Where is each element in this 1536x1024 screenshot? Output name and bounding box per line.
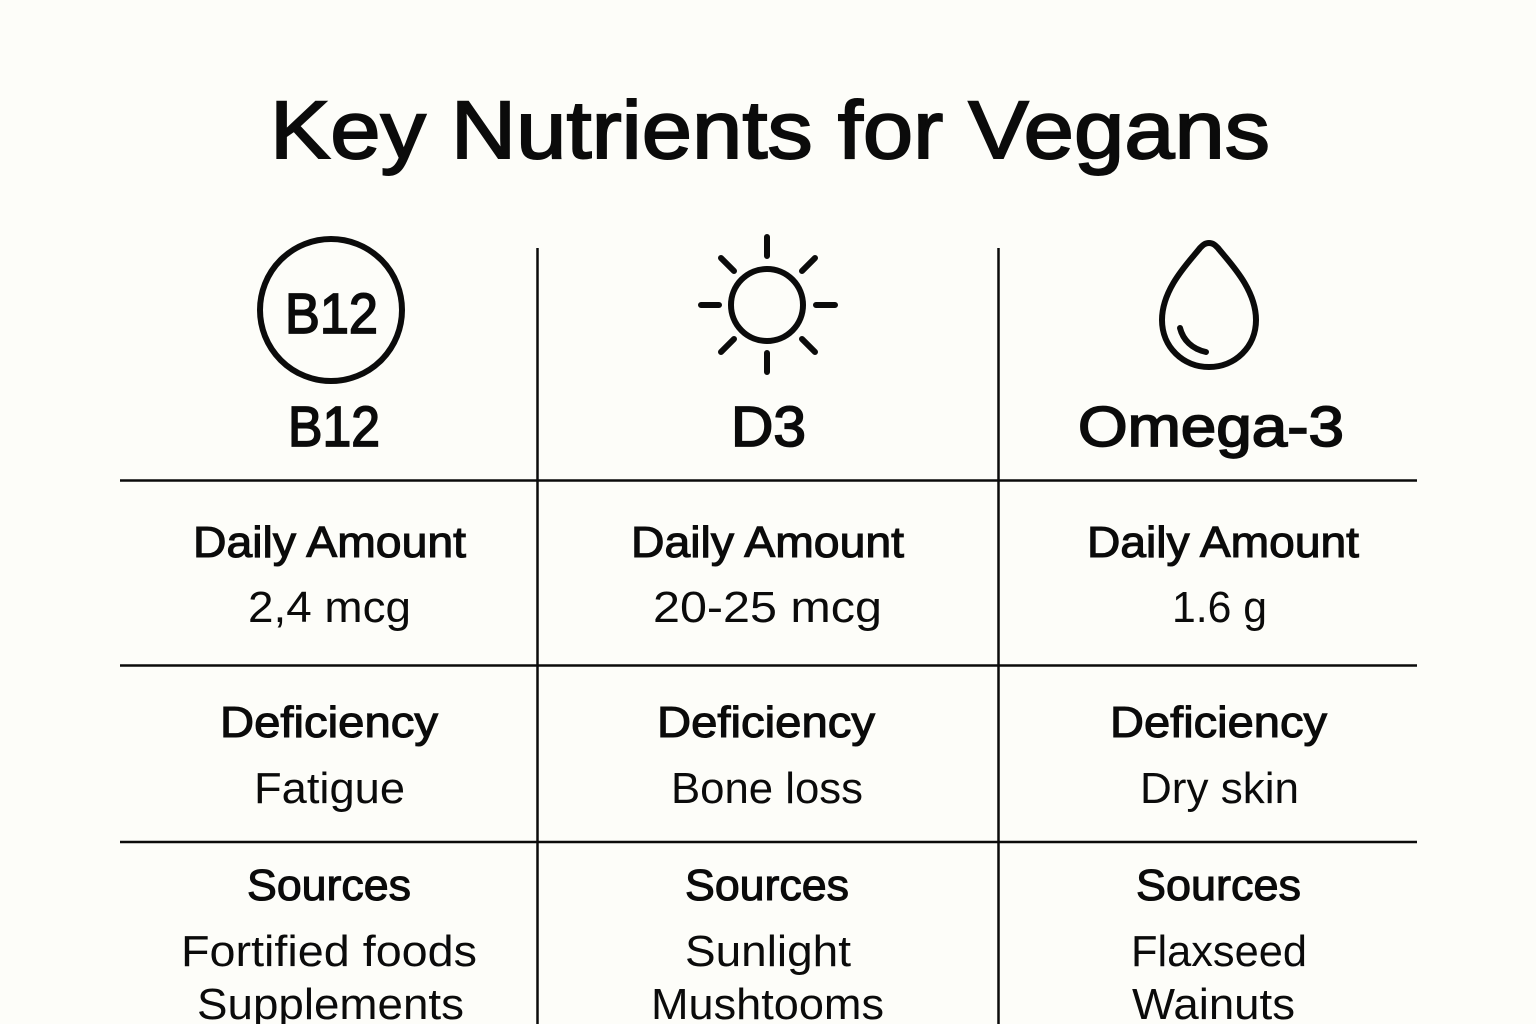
icon: B12 circle [260,239,402,381]
deficiency: D3: Deficiency [657,698,875,747]
deficiency: B12 [220,698,438,813]
daily amount: D3 [631,518,904,632]
daily amount: B12: Daily Amount [193,518,466,567]
icon: oil drop [1162,243,1256,367]
daily amount: D3: Daily Amount [631,518,904,567]
column: D3 [631,237,904,1024]
deficiency: Omega-3 [1110,698,1327,813]
column: Omega-3 [1078,243,1359,1024]
heading: Omega-3: Omega-3 [1078,395,1344,459]
daily amount: B12: 2,4 mcg [248,583,411,632]
sources: B12 [181,861,477,1024]
sources: Omega-3: Flaxseed [1131,927,1307,976]
sources: D3 [651,861,884,1024]
icon: sun [701,237,835,372]
icon: B12 circle: B12 [285,282,378,346]
sources: Omega-3 [1131,861,1307,1024]
title: Key Nutrients for Vegans [270,85,1270,176]
column: B12 [181,239,477,1024]
sources: D3: Sources [685,861,849,910]
daily amount: Omega-3: 1.6 g [1172,583,1267,632]
heading: D3: D3 [731,395,806,459]
sources: Omega-3: Sources [1136,861,1301,910]
deficiency: B12: Fatigue [254,764,405,813]
sources: B12: Sources [247,861,411,910]
daily amount: Omega-3 [1087,518,1359,632]
sources: D3: Sunlight [685,927,851,976]
deficiency: D3 [657,698,875,813]
deficiency: D3: Bone loss [671,764,863,813]
table grid [120,248,1417,1024]
daily amount: D3: 20-25 mcg [653,583,882,632]
daily amount: Omega-3: Daily Amount [1087,518,1359,567]
sources: B12: Fortified foods [181,927,477,976]
deficiency: Omega-3: Dry skin [1140,764,1299,813]
deficiency: Omega-3: Deficiency [1110,698,1327,747]
daily amount: B12 [193,518,466,632]
heading: B12: B12 [288,395,380,459]
deficiency: B12: Deficiency [220,698,438,747]
